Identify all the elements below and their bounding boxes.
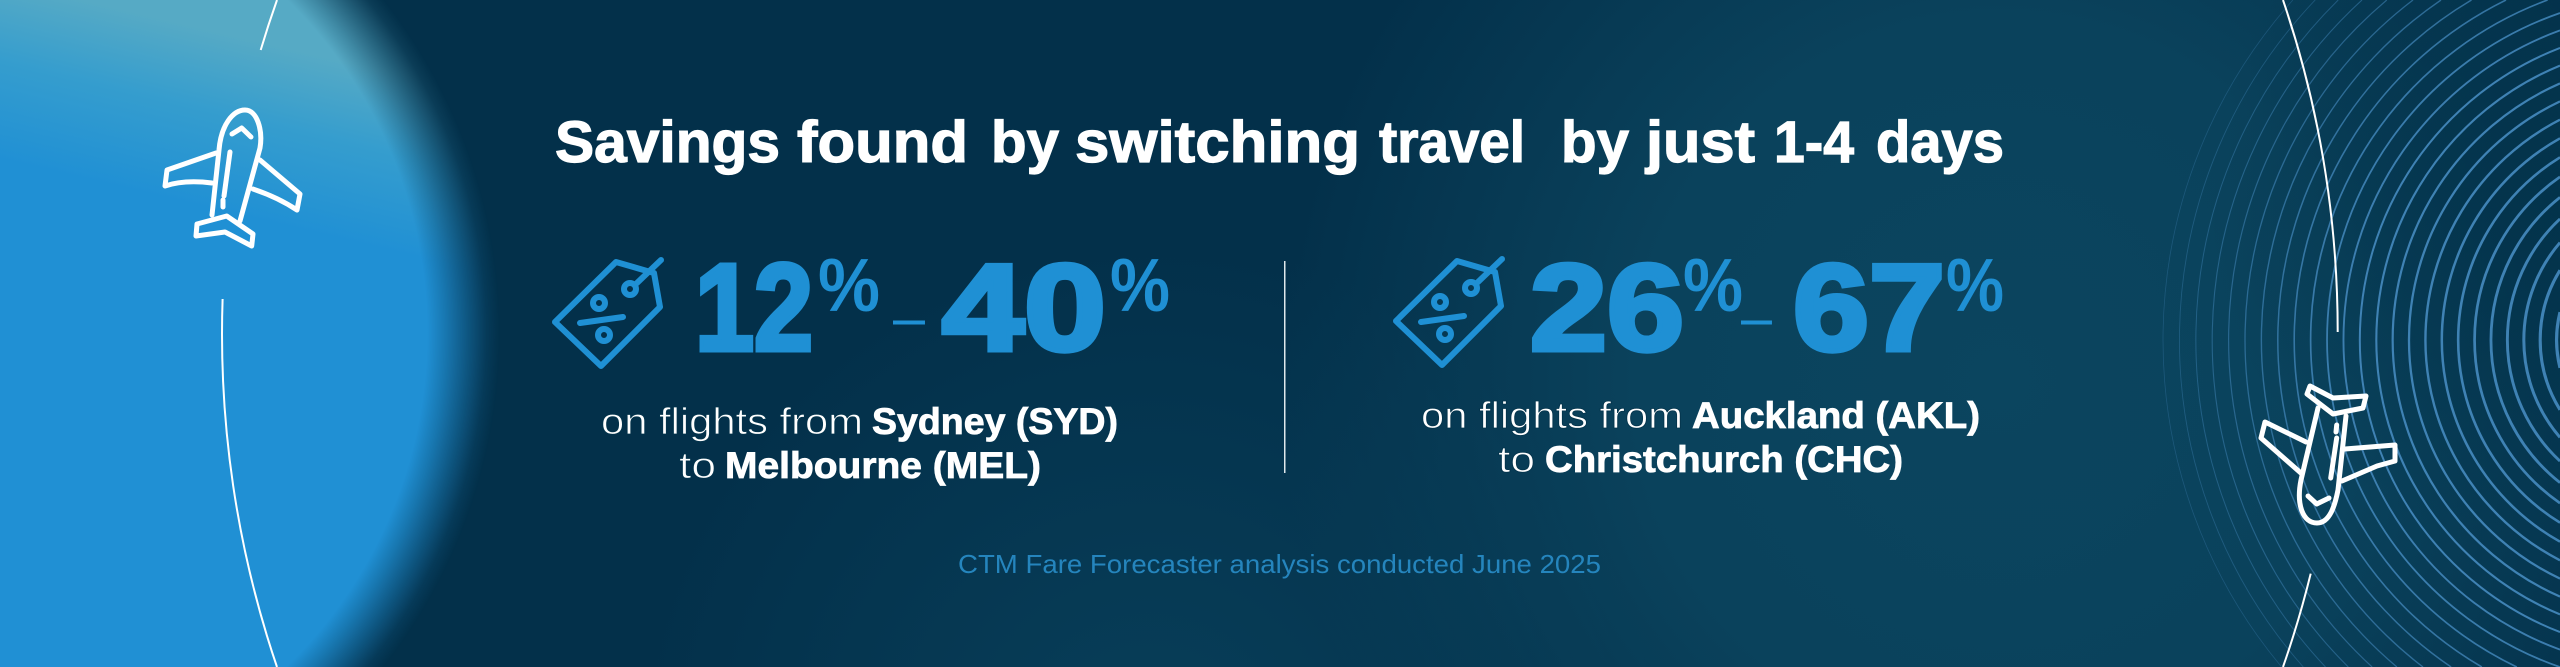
figure: 26 to 67 percent: 26 [1530, 240, 1684, 377]
title: by [1561, 110, 1629, 175]
stat: Auckland to Christchurch [1396, 240, 2004, 480]
title [555, 110, 2004, 175]
route text: to [1498, 439, 1535, 480]
concentric rings [2163, 0, 2560, 667]
figure: 26 to 67 percent: – [1741, 284, 1773, 351]
title: days [1876, 110, 2004, 175]
divider [1284, 261, 1286, 473]
icon: plane right [2261, 386, 2395, 523]
route text: on flights from [1421, 395, 1683, 436]
footnote: CTM Fare Forecaster analysis conducted June 2025 [958, 549, 1601, 579]
route text: Sydney (SYD) [872, 401, 1118, 442]
figure: 12 to 40 percent: 40 [942, 240, 1106, 377]
icon: plane left [165, 110, 300, 246]
route text: Auckland (AKL) [1692, 395, 1980, 436]
route text: Christchurch (CHC) [1545, 439, 1903, 480]
figure: 12 to 40 percent [695, 240, 1170, 377]
title: found [797, 110, 968, 175]
flight path: right [2283, 0, 2338, 667]
route text [1421, 395, 1980, 480]
figure: 26 to 67 percent: % [1946, 243, 2004, 327]
title: 1-4 [1774, 110, 1854, 175]
stat: Sydney to Melbourne [555, 240, 1170, 486]
title: just [1645, 110, 1755, 175]
title: travel [1379, 110, 1525, 175]
route text [601, 401, 1118, 486]
left blue circle [0, 0, 492, 667]
route text: to [679, 445, 716, 486]
figure: 26 to 67 percent: % [1683, 243, 1743, 327]
title: Savings [555, 110, 780, 175]
title: by [991, 110, 1059, 175]
figure: 26 to 67 percent [1530, 240, 2004, 377]
route text: Melbourne (MEL) [725, 445, 1041, 486]
title: switching [1075, 110, 1360, 175]
figure: 12 to 40 percent: 12 [695, 240, 813, 377]
flight path: left [222, 0, 277, 667]
icon: price tag left [555, 260, 661, 366]
icon: price tag right [1396, 259, 1502, 365]
route text: on flights from [601, 401, 863, 442]
figure: 26 to 67 percent: 67 [1793, 240, 1945, 377]
figure: 12 to 40 percent: % [818, 243, 880, 327]
figure: 12 to 40 percent: % [1110, 243, 1170, 327]
figure: 12 to 40 percent: – [893, 284, 926, 351]
